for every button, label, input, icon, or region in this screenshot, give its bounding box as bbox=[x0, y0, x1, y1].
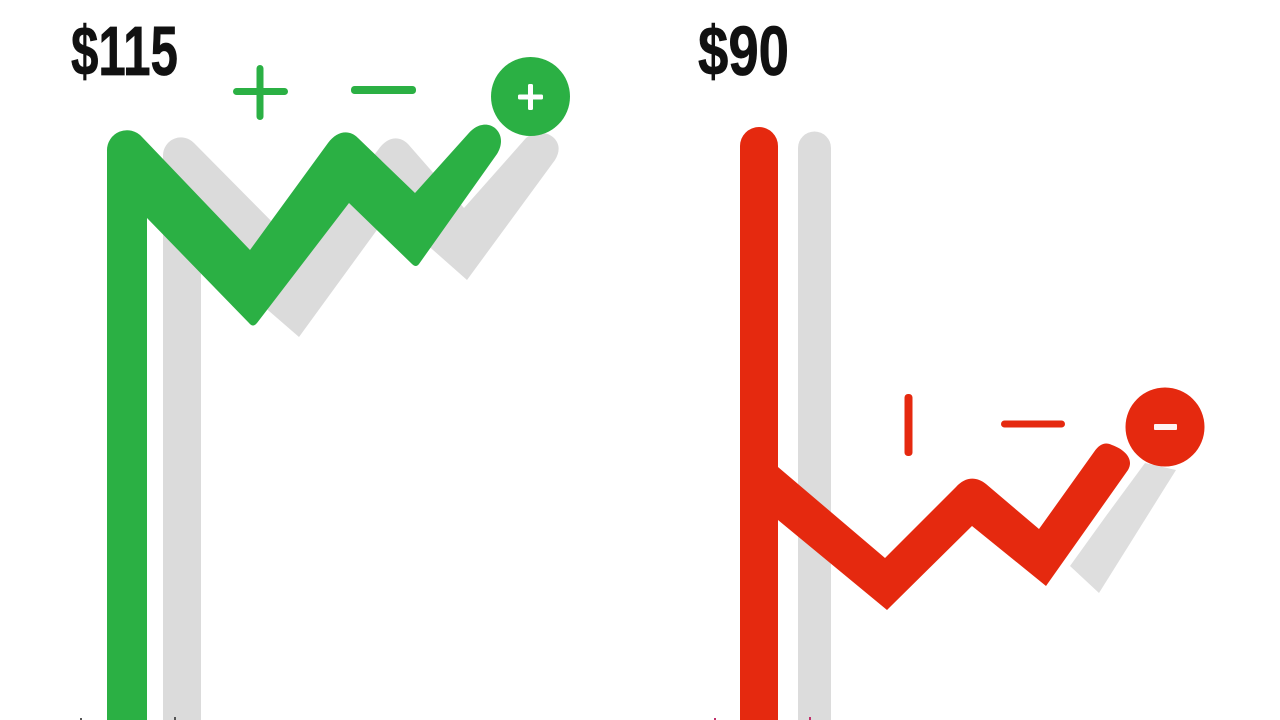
gray shadow line: green chart bbox=[163, 133, 559, 720]
red chart line bbox=[740, 127, 1130, 720]
tiny cropped marks at the bottom edge bbox=[714, 717, 811, 720]
icon: plus badge bbox=[491, 57, 570, 136]
price label: $90: $90 bbox=[698, 12, 789, 90]
icon: minus badge bbox=[1126, 388, 1204, 466]
green chart line bbox=[107, 125, 501, 720]
icon: plus sign bbox=[233, 65, 288, 120]
icon: minus sign bbox=[351, 86, 416, 94]
icon: vertical tick bbox=[904, 394, 912, 456]
panel: green rising price bbox=[71, 12, 570, 720]
panel: red falling price bbox=[698, 12, 1204, 720]
tiny cropped marks at the bottom edge bbox=[80, 717, 176, 720]
price label: $115: $115 bbox=[71, 12, 178, 90]
gray shadow line: red chart bbox=[798, 132, 1176, 720]
icon: minus sign bbox=[1001, 420, 1065, 428]
